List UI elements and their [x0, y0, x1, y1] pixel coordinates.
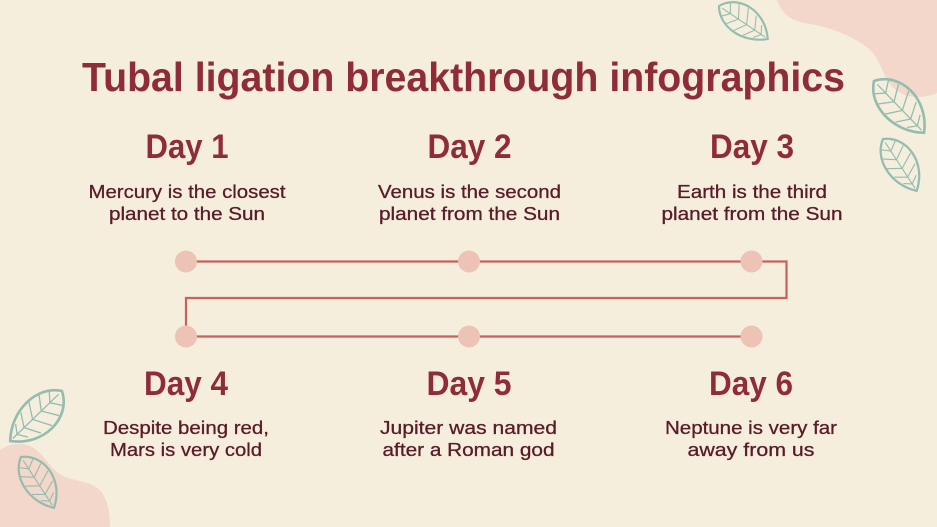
leaf: right lower: [871, 130, 931, 198]
step: day 1: Mercury is the closest: [88, 181, 286, 202]
step: day 6: [665, 365, 837, 460]
step: day 6: away from us: [688, 439, 814, 460]
step: day 2: Day 2: [428, 128, 512, 166]
blob: top right: [777, 0, 937, 97]
blob: bottom left: [0, 444, 110, 527]
step: day 4: [103, 365, 269, 460]
step: day 3: Earth is the third: [677, 181, 827, 202]
step: day 4: Day 4: [144, 365, 228, 403]
step: day 2: [378, 128, 561, 224]
leaf: top: [712, 0, 777, 50]
step: day 1: planet to the Sun: [109, 203, 265, 224]
step: day 2: Venus is the second: [378, 181, 561, 202]
step: day 1: Day 1: [146, 128, 228, 166]
step: day 3: Day 3: [710, 128, 794, 166]
step: day 5: Jupiter was named: [380, 417, 557, 438]
step: day 5: after a Roman god: [382, 439, 554, 460]
timeline connector: [186, 262, 786, 336]
leaf: bottom left lower: [10, 448, 68, 515]
timeline nodes: [175, 250, 762, 348]
title: Tubal ligation breakthrough infographics: [82, 54, 845, 100]
step: day 3: [662, 128, 842, 224]
step: day 4: Mars is very cold: [110, 439, 262, 460]
step: day 5: Day 5: [426, 365, 512, 403]
step: day 3: planet from the Sun: [662, 203, 842, 224]
step: day 6: Neptune is very far: [665, 417, 837, 438]
step: day 4: Despite being red,: [103, 417, 269, 438]
step: day 5: [380, 365, 557, 460]
step: day 1: [88, 128, 286, 224]
step: day 2: planet from the Sun: [379, 203, 560, 224]
step: day 6: Day 6: [709, 365, 793, 403]
leaf: bottom left upper: [0, 379, 76, 455]
leaf: right upper: [862, 67, 937, 144]
